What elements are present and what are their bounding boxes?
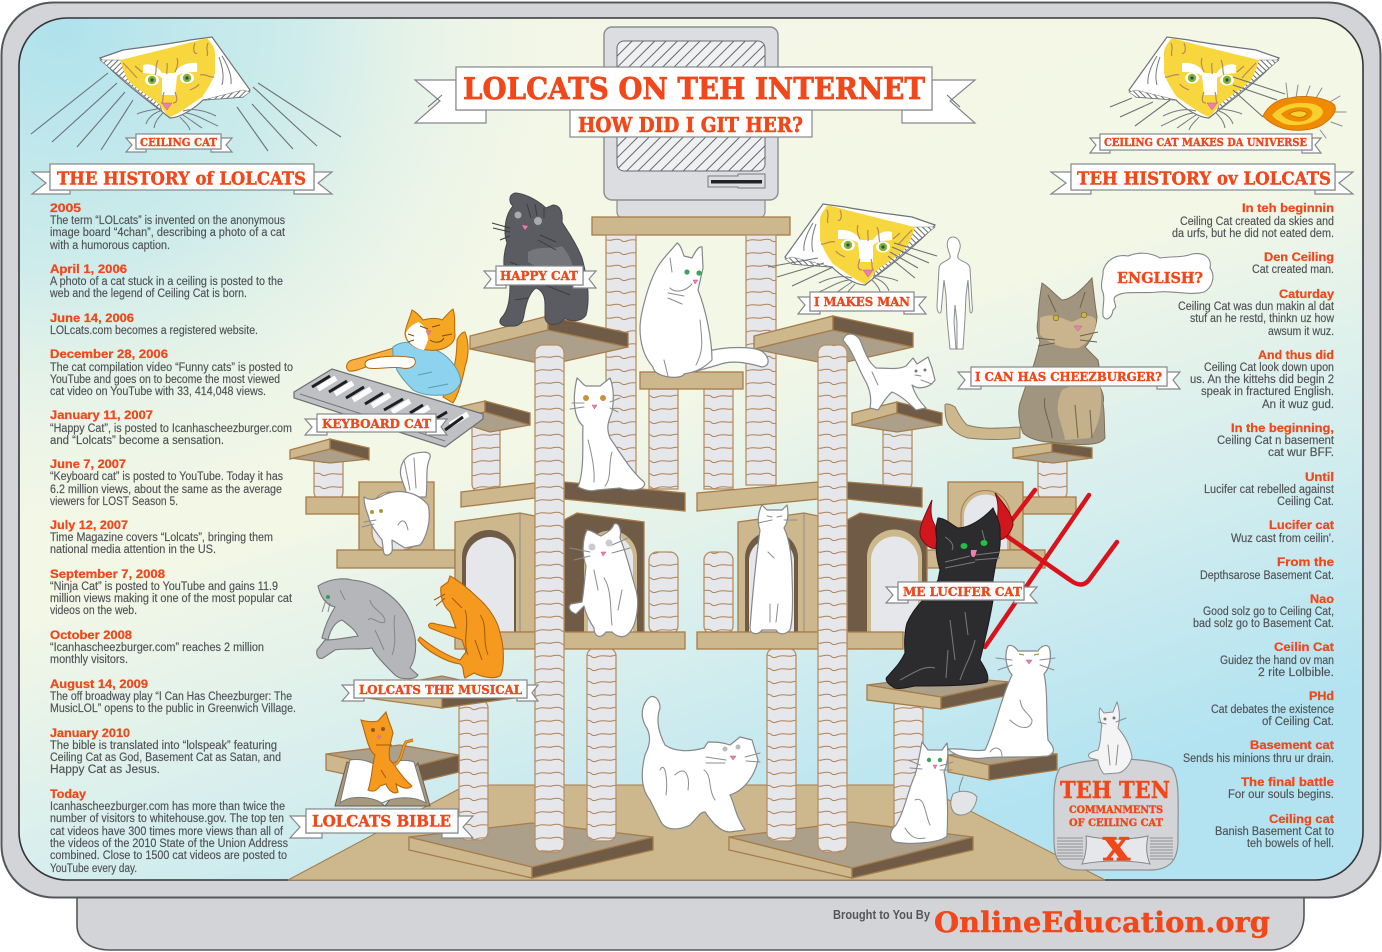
entry august 14 2009: The off broadway play “I Can Has Cheezburger: The xyxy=(50,691,292,703)
entry 2005: 2005 xyxy=(50,201,81,215)
tablet xyxy=(1054,759,1178,870)
banner i makes man xyxy=(798,292,926,314)
entry october 2008 xyxy=(50,628,264,666)
entry from the: From the xyxy=(1277,555,1334,569)
lower right shelf xyxy=(948,750,1057,780)
entry today: combined. Close to 1500 cat videos are posted to xyxy=(50,850,287,862)
entry phd: PHd xyxy=(1309,689,1334,703)
white bottom walking cat xyxy=(642,697,760,832)
entry december 28 2006: cat video on YouTube with 33, 414,048 views. xyxy=(50,386,266,398)
entry september 7 2008 xyxy=(50,567,293,617)
entry in the beginning: Ceiling Cat n basement xyxy=(1217,435,1335,447)
banner ceiling cat makes da universe xyxy=(1090,134,1321,153)
entry until: Until xyxy=(1305,470,1334,484)
subtitle text: HOW DID I GIT HER? xyxy=(578,113,803,137)
entry today xyxy=(50,787,288,875)
banner happy cat xyxy=(484,266,596,288)
entry and thus did: us. An the kittehs did begin 2 xyxy=(1190,374,1334,386)
entry in the beginning: In the beginning, xyxy=(1231,421,1334,435)
entry from the: Depthsarose Basement Cat. xyxy=(1200,570,1334,582)
entry ceilin cat: Guidez the hand ov man xyxy=(1220,655,1334,667)
left column: history timeline xyxy=(49,201,296,875)
shelf upper right xyxy=(754,316,913,365)
banner happy cat: HAPPY CAT xyxy=(500,268,579,283)
entry june 7 2007: “Keyboard cat” is posted to YouTube. Today it has xyxy=(50,471,283,483)
speech bubble english: ENGLISH? xyxy=(1117,269,1203,287)
white cat in dark hut xyxy=(569,524,638,637)
main title banner xyxy=(415,67,975,137)
entry september 7 2008: “Ninja Cat” is posted to YouTube and gains 11.9 xyxy=(50,581,278,593)
white cat sitting up xyxy=(948,645,1055,759)
entry december 28 2006: The cat compilation video “Funny cats” is posted to xyxy=(50,362,293,374)
entry in teh beginnin: In teh beginnin xyxy=(1242,201,1334,215)
entry january 2010: Ceiling Cat as God, Basement Cat as Satan, and xyxy=(50,752,281,764)
footer credit: Brought to You By xyxy=(833,908,930,922)
entry august 14 2009: August 14, 2009 xyxy=(50,677,148,691)
hut left dark xyxy=(564,513,685,649)
entry january 2010: The bible is translated into “lolspeak” featuring xyxy=(50,740,277,752)
entry and thus did: Ceiling Cat look down upon xyxy=(1204,362,1334,374)
speech bubble english xyxy=(1101,253,1213,319)
entry caturday: stuf an he restd, thinkn uz how xyxy=(1190,313,1335,325)
entry april 1 2006: web and the legend of Ceiling Cat is born. xyxy=(49,288,247,300)
entry the final battle xyxy=(1228,775,1334,801)
small plank under white cat xyxy=(640,372,743,389)
entry ceiling cat: Ceiling cat xyxy=(1269,812,1334,826)
bible shelf xyxy=(326,745,459,786)
ceiling cat xyxy=(31,37,341,151)
lower arm xyxy=(365,356,415,369)
entry the final battle: For our souls begins. xyxy=(1228,789,1334,801)
entry nao: Good solz go to Ceiling Cat, xyxy=(1203,606,1334,618)
musical shelf xyxy=(367,676,514,708)
entry january 2010 xyxy=(50,726,281,776)
entry until xyxy=(1204,470,1335,508)
entry caturday: Caturday xyxy=(1279,287,1334,301)
entry ceiling cat: Banish Basement Cat to xyxy=(1215,826,1334,838)
entry basement cat xyxy=(1183,738,1334,765)
entry today: number of visitors to whitehouse.gov. The top ten xyxy=(50,813,284,825)
banner me lucifer cat xyxy=(886,582,1037,603)
banner teh history ov lolcats xyxy=(1051,164,1353,194)
entry today: YouTube every day. xyxy=(50,863,137,875)
entry june 14 2006 xyxy=(50,311,258,337)
white sitting cat on top xyxy=(640,243,768,377)
entry june 7 2007: 6.2 million views, about the same as the average xyxy=(50,484,282,496)
perch left xyxy=(445,401,530,432)
entry lucifer cat: Wuz cast from ceilin'. xyxy=(1231,533,1334,545)
right column: lolspeak history xyxy=(1172,201,1335,850)
mid level shelves xyxy=(461,482,922,511)
entry june 7 2007: June 7, 2007 xyxy=(50,457,126,471)
head xyxy=(405,309,455,350)
entry june 14 2006: June 14, 2006 xyxy=(50,311,134,325)
keyboard cat xyxy=(347,309,468,403)
white standing cat xyxy=(750,505,797,634)
entry in teh beginnin xyxy=(1172,201,1334,240)
banner keyboard cat xyxy=(305,414,447,435)
ninja gray cat xyxy=(317,579,418,679)
universe swirl xyxy=(1263,83,1346,138)
man silhouette xyxy=(937,237,972,349)
ceiling cat makes man xyxy=(768,204,937,297)
banner i can has cheezburger: I CAN HAS CHEEZBURGER? xyxy=(975,369,1162,384)
banner i makes man: I MAKES MAN xyxy=(814,294,910,309)
entry and thus did: speak in fractured English. xyxy=(1201,386,1334,398)
tan cheezburger cat xyxy=(945,278,1105,445)
entry july 12 2007 xyxy=(50,518,273,556)
entry in teh beginnin: da urfs, but he did not eated dem. xyxy=(1172,228,1334,240)
toy xyxy=(951,777,977,815)
lower posts xyxy=(459,648,923,841)
entry july 12 2007: July 12, 2007 xyxy=(50,518,128,532)
banner the history of lolcats xyxy=(32,164,332,194)
entry 2005: image board “4chan”, describing a photo of a cat xyxy=(50,227,286,239)
entry nao: bad solz go to Basement Cat. xyxy=(1193,618,1334,630)
entry lucifer cat: Lucifer cat xyxy=(1269,518,1334,532)
entry july 12 2007: Time Magazine covers “Lolcats”, bringing them xyxy=(50,532,273,544)
footer credit: OnlineEducation.org xyxy=(934,906,1270,939)
banner ceiling cat: CEILING CAT xyxy=(140,135,217,149)
title text: LOLCATS ON TEH INTERNET xyxy=(463,72,926,107)
entry and thus did: An it wuz gud. xyxy=(1262,399,1334,411)
entry june 14 2006: LOLcats.com becomes a registered website. xyxy=(50,325,258,337)
box and shelf right xyxy=(927,482,1076,568)
shelf upper left xyxy=(470,316,628,365)
entry june 7 2007 xyxy=(50,457,283,508)
entry april 1 2006 xyxy=(49,262,283,300)
entry july 12 2007: national media attention in the US. xyxy=(50,544,216,556)
entry today: cat videos have 300 times more views than all of xyxy=(50,826,284,838)
entry september 7 2008: million views making it one of the most popular cat xyxy=(50,593,293,605)
entry september 7 2008: videos on the web. xyxy=(50,605,137,617)
entry ceilin cat: Ceilin Cat xyxy=(1274,640,1334,654)
cat tree xyxy=(290,217,1092,878)
banner lolcats bible: LOLCATS BIBLE xyxy=(312,812,451,830)
entry april 1 2006: April 1, 2006 xyxy=(50,262,127,276)
entry the final battle: The final battle xyxy=(1241,775,1334,789)
entry december 28 2006 xyxy=(50,347,293,398)
shirt xyxy=(393,342,460,395)
perch right xyxy=(852,402,942,432)
entry from the xyxy=(1200,555,1334,582)
banner ceiling cat xyxy=(126,134,232,152)
banner keyboard cat: KEYBOARD CAT xyxy=(322,416,432,431)
entry january 11 2007: and “Lolcats” become a sensation. xyxy=(50,435,224,447)
entry 2005: The term “LOLcats” is invented on the anonymous xyxy=(50,215,285,227)
entry january 2010: January 2010 xyxy=(50,726,130,740)
white cat in box xyxy=(362,452,430,555)
tablet subtitle line two: OF CEILING CAT xyxy=(1069,817,1163,829)
pitchfork xyxy=(985,490,1117,647)
entry phd: of Ceiling Cat. xyxy=(1262,716,1334,728)
entry january 11 2007: January 11, 2007 xyxy=(50,408,153,422)
happy cat xyxy=(492,193,588,326)
monitor stand xyxy=(77,895,1304,950)
entry in teh beginnin: Ceiling Cat created da skies and xyxy=(1180,216,1334,228)
entry den ceiling xyxy=(1252,250,1334,276)
base left xyxy=(409,823,653,878)
entry ceilin cat xyxy=(1220,640,1334,679)
entry january 11 2007: “Happy Cat”, is posted to Icanhascheezburger.com xyxy=(50,423,292,435)
entry lucifer cat xyxy=(1231,518,1334,545)
ceiling cat makes da universe xyxy=(1110,37,1346,138)
entry today: Icanhascheezburger.com has more than twice the xyxy=(50,801,285,813)
banner teh history ov lolcats: TEH HISTORY ov LOLCATS xyxy=(1077,170,1331,190)
entry until: Ceiling Cat. xyxy=(1277,496,1334,508)
small cat on tablet xyxy=(1088,702,1132,774)
tablet title: TEH TEN xyxy=(1060,777,1170,804)
central posts xyxy=(535,345,847,852)
entry september 7 2008: September 7, 2008 xyxy=(50,567,165,581)
entry phd: Cat debates the existence xyxy=(1211,704,1334,716)
entry ceilin cat: 2 rite Lolbible. xyxy=(1258,667,1334,679)
entry phd xyxy=(1211,689,1334,728)
upper posts xyxy=(314,235,1067,634)
entry august 14 2009: MusicLOL” opens to the public in Greenwich Village. xyxy=(50,703,296,715)
entry today: Today xyxy=(50,787,86,801)
computer monitor xyxy=(604,27,778,218)
hut left tan xyxy=(455,513,535,649)
hut right dark xyxy=(847,513,927,649)
entry october 2008: monthly visitors. xyxy=(50,654,128,666)
entry december 28 2006: December 28, 2006 xyxy=(50,347,168,361)
book xyxy=(335,760,430,806)
entry october 2008: “Icanhascheezburger.com” reaches 2 million xyxy=(50,642,264,654)
entry until: Lucifer cat rebelled against xyxy=(1204,484,1335,496)
entry and thus did: And thus did xyxy=(1258,348,1334,362)
entry today: the videos of the 2010 State of the Union Address xyxy=(50,838,288,850)
orange musical cat xyxy=(418,576,503,678)
entry den ceiling: Cat created man. xyxy=(1252,264,1334,276)
entry 2005: with a humorous caption. xyxy=(49,240,170,252)
entry december 28 2006: YouTube and goes on to become the most viewed xyxy=(50,374,280,386)
entry august 14 2009 xyxy=(50,677,296,715)
floor xyxy=(288,785,1105,880)
entry in the beginning xyxy=(1217,421,1335,459)
entry caturday: awsum it wuz. xyxy=(1268,326,1334,338)
white cat with toy xyxy=(891,742,977,843)
lucifer black cat xyxy=(886,493,1013,689)
box and shelf left xyxy=(306,482,455,568)
entry nao xyxy=(1193,592,1334,630)
white walking cat xyxy=(843,334,935,410)
hut right tan xyxy=(697,513,818,649)
banner the history of lolcats: THE HISTORY of LOLCATS xyxy=(57,170,306,190)
banner i can has cheezburger xyxy=(958,367,1180,389)
entry ceiling cat: teh bowels of hell. xyxy=(1247,838,1334,850)
top plank xyxy=(592,217,790,235)
banner lolcats bible xyxy=(290,809,473,838)
banner lolcats the musical xyxy=(342,680,538,701)
entry nao: Nao xyxy=(1310,592,1334,606)
white cat mid left xyxy=(570,378,645,491)
perch far left xyxy=(290,439,369,463)
entry basement cat: Basement cat xyxy=(1250,738,1334,752)
tablet numeral: X xyxy=(1103,832,1131,868)
banner ceiling cat makes da universe: CEILING CAT MAKES DA UNIVERSE xyxy=(1104,135,1307,149)
entry in the beginning: cat wur BFF. xyxy=(1268,447,1334,459)
entry 2005 xyxy=(49,201,286,252)
perch far right xyxy=(1013,443,1092,463)
lucifer shelf xyxy=(867,676,1010,709)
entry january 2010: Happy Cat as Jesus. xyxy=(50,764,160,776)
banner lolcats the musical: LOLCATS THE MUSICAL xyxy=(359,682,522,697)
entry caturday xyxy=(1178,287,1335,338)
entry june 7 2007: viewers for LOST Season 5. xyxy=(50,496,178,508)
entry ceiling cat xyxy=(1215,812,1334,850)
tablet subtitle: COMMANMENTS xyxy=(1069,804,1163,816)
entry april 1 2006: A photo of a cat stuck in a ceiling is posted to the xyxy=(50,276,283,288)
entry october 2008: October 2008 xyxy=(50,628,132,642)
banner me lucifer cat: ME LUCIFER CAT xyxy=(903,584,1023,599)
entry caturday: Ceiling Cat was dun makin al dat xyxy=(1178,301,1335,313)
base right xyxy=(729,822,973,878)
upper arm xyxy=(347,347,402,371)
entry january 11 2007 xyxy=(50,408,292,447)
orange bible cat xyxy=(361,712,413,793)
entry and thus did xyxy=(1190,348,1334,411)
keyboard xyxy=(294,369,483,447)
tail xyxy=(443,332,468,403)
horns xyxy=(920,493,1013,549)
entry basement cat: Sends his minions thru ur drain. xyxy=(1183,753,1334,765)
entry den ceiling: Den Ceiling xyxy=(1264,250,1334,264)
